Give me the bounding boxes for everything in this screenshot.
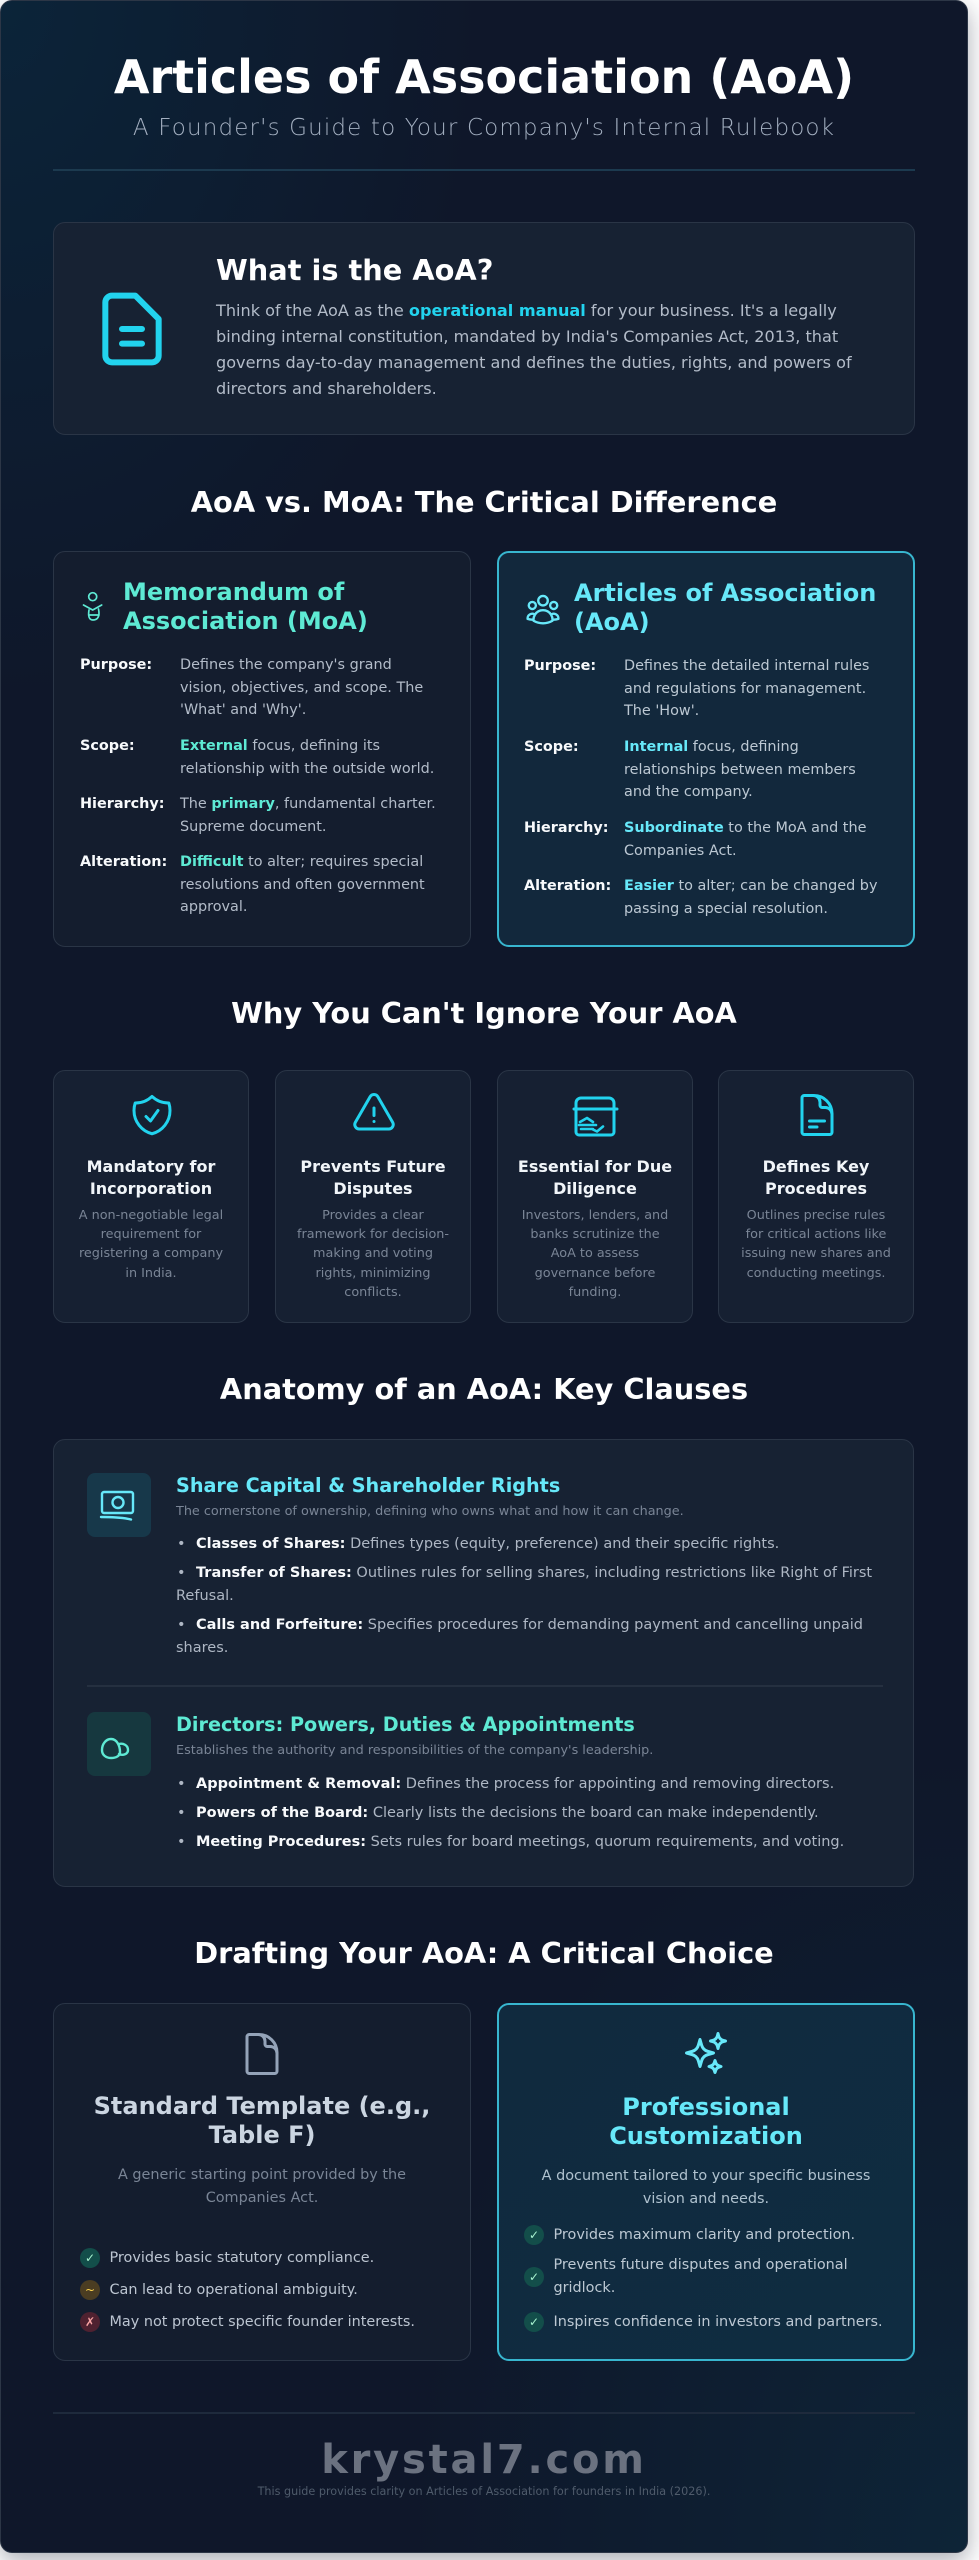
bullet: calls and forfeiture: •: [177, 1617, 186, 1633]
row: hierarchy: Hierarchy:: [80, 796, 165, 812]
card title: [300, 1157, 446, 1198]
row: alteration: Alteration:: [80, 854, 167, 870]
row: hierarchy: The primary, fundamental charter.: [180, 796, 436, 812]
card text: framework for decision-: [297, 1227, 449, 1242]
list item: basic compliance: ✓: [85, 2251, 95, 2265]
card title: [87, 1157, 216, 1198]
card text: [522, 1208, 668, 1300]
card text: A non-negotiable legal: [79, 1208, 223, 1223]
card title: Defines Key: [763, 1157, 869, 1176]
row: purpose: Defines the detailed internal rules: [624, 658, 869, 674]
description: [118, 2167, 406, 2206]
card title: Disputes: [333, 1179, 413, 1198]
bullet: calls and forfeiture: shares.: [176, 1640, 228, 1656]
clause subtitle: The cornerstone of ownership, defining who owns what and how it can change.: [176, 1504, 684, 1519]
bullet: powers of the board: •: [177, 1805, 186, 1821]
heading: AoA: [574, 579, 876, 636]
card text: [741, 1208, 891, 1281]
heading: AoA: Articles of Association: [574, 579, 876, 607]
row: purpose: Purpose:: [80, 657, 152, 673]
row: scope: Scope:: [80, 738, 135, 754]
card: essential for due diligence: [497, 1070, 693, 1323]
heading: MoA: Memorandum of: [123, 578, 344, 606]
card text: conducting meetings.: [747, 1266, 885, 1281]
card title: Essential for Due: [518, 1157, 672, 1176]
card text: governance before: [535, 1266, 655, 1281]
card: defines key procedures: [718, 1070, 914, 1323]
heading: AoA vs MoA: AoA vs. MoA: The Critical Difference: [191, 485, 777, 519]
icon: bank card: [572, 1096, 618, 1136]
card text: in India.: [125, 1266, 177, 1281]
icon: sparkles: [682, 2029, 730, 2077]
card title: [518, 1157, 672, 1198]
row: scope: and the company.: [624, 784, 753, 800]
bullet: transfer of shares: [176, 1565, 872, 1604]
list item: clarity: [524, 2225, 894, 2247]
row: hierarchy: Hierarchy:: [524, 820, 609, 836]
icon: document text: [800, 1094, 834, 1136]
row: scope: Scope:: [524, 739, 579, 755]
description: vision and needs.: [643, 2191, 769, 2207]
clause bullets: Classes of Shares: Defines types (equity, preference) and their specific rights.: [196, 1536, 779, 1552]
row: purpose: [524, 658, 869, 719]
card text: [78, 1208, 223, 1281]
list item: ambiguity: ~: [85, 2283, 95, 2297]
row: alteration: resolutions and often government: [180, 877, 425, 893]
intro paragraph: binding internal constitution, mandated by India's Companies Act, 2013, that: [216, 327, 838, 346]
row: alteration: Easier to alter; can be changed by: [624, 878, 877, 894]
panel: articles of association: [497, 551, 915, 947]
card text: Outlines precise rules: [747, 1208, 885, 1223]
footer note: This guide provides clarity on Articles of Association for founders in India (2026).: [258, 2485, 710, 2498]
card text: Provides a clear: [322, 1208, 424, 1223]
heading: MoA: Association (MoA): [123, 607, 368, 635]
clause: share capital: [87, 1473, 872, 1656]
clause subtitle: Establishes the authority and responsibilities of the company's leadership.: [176, 1743, 653, 1758]
card: prevents future disputes: [275, 1070, 471, 1323]
list item: clarity: ✓: [529, 2228, 539, 2242]
description: A document tailored to your specific business: [542, 2168, 870, 2184]
list item: founder interests: ✗: [85, 2315, 95, 2329]
list item: disputes: ✓: [529, 2270, 539, 2284]
bullet: meeting procedures: Meeting Procedures: Sets rules for board meetings, quorum requirements, and voting.: [196, 1834, 844, 1850]
row: hierarchy: Supreme document.: [180, 819, 326, 835]
clause bullets: •: [177, 1536, 186, 1552]
list item: clarity: Provides maximum clarity and protection.: [554, 2226, 855, 2242]
panel: what is the AoA: [53, 222, 915, 435]
icon: blank document: [246, 2033, 278, 2075]
row: scope: relationships between members: [624, 762, 856, 778]
bullet: meeting procedures: •: [177, 1834, 186, 1850]
icon: MoA person: [82, 592, 102, 621]
intro paragraph: directors and shareholders.: [216, 379, 437, 398]
list item: founder interests: May not protect specific founder interests.: [110, 2314, 415, 2330]
panel: memorandum of association: [53, 551, 471, 947]
card text: for critical actions like: [746, 1227, 886, 1242]
card text: AoA to assess: [551, 1246, 639, 1261]
heading: anatomy: Anatomy of an AoA: Key Clauses: [220, 1372, 748, 1406]
description: [499, 2165, 913, 2210]
card title: Procedures: [765, 1179, 867, 1198]
heading: what is the AoA: What is the AoA?: [216, 253, 493, 287]
list item: disputes: gridlock.: [554, 2280, 615, 2296]
intro paragraph: [216, 301, 852, 398]
icon: document: [102, 292, 162, 366]
card title: [763, 1157, 869, 1198]
list item: confidence: Inspires confidence in investors and partners.: [554, 2314, 883, 2330]
card text: Investors, lenders, and: [522, 1208, 668, 1223]
card text: issuing new shares and: [741, 1246, 891, 1261]
intro paragraph: governs day-to-day management and defines the duties, rights, and powers of: [216, 353, 852, 372]
clause: directors: [87, 1712, 844, 1850]
row: scope: External focus, defining its: [180, 738, 380, 754]
row: purpose: The 'How'.: [624, 703, 699, 719]
bullet: transfer of shares: •: [177, 1565, 186, 1581]
bullet: appointment and removal: •: [177, 1776, 186, 1792]
panel: key clauses: [53, 1439, 914, 1887]
icon: user group: [526, 594, 560, 624]
title: Professional: [622, 2093, 790, 2121]
row: scope: relationship with the outside world.: [180, 761, 434, 777]
card text: conflicts.: [344, 1285, 402, 1300]
panel: professional customization: [497, 2003, 915, 2361]
row: alteration: Alteration:: [524, 878, 611, 894]
card title: Prevents Future: [300, 1157, 446, 1176]
heading: AoA: (AoA): [574, 608, 650, 636]
row: alteration: approval.: [180, 899, 247, 915]
row: alteration: Difficult to alter; requires special: [180, 854, 423, 870]
row: purpose: Defines the company's grand: [180, 657, 392, 673]
list item: confidence: ✓: [529, 2315, 539, 2329]
row: purpose: and regulations for management.: [624, 681, 866, 697]
description: Companies Act.: [206, 2190, 318, 2206]
row: scope: [524, 739, 856, 800]
description: A generic starting point provided by the: [118, 2167, 406, 2183]
heading: MoA: [123, 578, 368, 635]
row: purpose: vision, objectives, and scope. The: [180, 680, 423, 696]
card title: Diligence: [553, 1179, 637, 1198]
bullet: calls and forfeiture: [176, 1617, 863, 1656]
title: Table F): [209, 2121, 315, 2149]
icon: blob: [87, 1712, 151, 1776]
card text: rights, minimizing: [315, 1266, 431, 1281]
list item: basic compliance: Provides basic statutory compliance.: [110, 2250, 374, 2266]
list item: disputes: Prevents future disputes and operational: [554, 2257, 848, 2273]
card text: funding.: [569, 1285, 621, 1300]
list item: confidence: [524, 2312, 894, 2334]
title: [499, 2093, 913, 2151]
row: purpose: 'What' and 'Why'.: [180, 702, 306, 718]
row: hierarchy: Companies Act.: [624, 843, 737, 859]
icon: banknote: [87, 1473, 151, 1537]
heading: why you can't ignore: Why You Can't Ignore Your AoA: [231, 996, 737, 1030]
clause title: Share Capital & Shareholder Rights: [176, 1474, 560, 1497]
row: alteration: [80, 854, 425, 915]
icon: shield check: [132, 1094, 172, 1136]
icon: warning triangle: [353, 1093, 395, 1130]
bullet: powers of the board: Powers of the Board: Clearly lists the decisions the board can make independently.: [196, 1805, 819, 1821]
card text: registering a company: [79, 1246, 223, 1261]
list item: ambiguity: Can lead to operational ambiguity.: [110, 2282, 358, 2298]
card text: banks scrutinize the: [530, 1227, 660, 1242]
title: Articles of Association (AoA): [114, 50, 854, 104]
title: Standard Template (e.g.,: [94, 2092, 430, 2120]
title: [94, 2092, 430, 2149]
row: purpose: Purpose:: [524, 658, 596, 674]
card text: requirement for: [101, 1227, 201, 1242]
row: scope: [80, 738, 434, 777]
row: scope: Internal focus, defining: [624, 739, 799, 755]
row: alteration: [524, 878, 878, 917]
clause title: Directors: Powers, Duties & Appointments: [176, 1713, 635, 1736]
card title: Incorporation: [90, 1179, 212, 1198]
heading: drafting: Drafting Your AoA: A Critical Choice: [194, 1936, 774, 1970]
card: mandatory for incorporation: [53, 1070, 249, 1323]
bullet: appointment and removal: Appointment & Removal: Defines the process for appointing and removing directors.: [196, 1776, 834, 1792]
row: purpose: [80, 657, 423, 718]
card text: [297, 1208, 449, 1300]
panel: standard template: [53, 2003, 471, 2361]
footer brand: krystal7.com: [321, 2437, 647, 2483]
row: alteration: passing a special resolution.: [624, 901, 828, 917]
intro paragraph: Think of the AoA as the operational manual for your business. It's a legally: [216, 301, 837, 320]
row: hierarchy: [80, 796, 436, 835]
list item: disputes: [524, 2254, 894, 2300]
subtitle: A Founder's Guide to Your Company's Internal Rulebook: [133, 115, 835, 141]
card title: Mandatory for: [87, 1157, 215, 1176]
bullet: calls and forfeiture: Calls and Forfeiture: Specifies procedures for demanding payment and cancelling unpaid: [196, 1617, 863, 1633]
title: Customization: [609, 2122, 803, 2150]
card text: making and voting: [313, 1246, 433, 1261]
bullet: transfer of shares: Refusal.: [176, 1588, 234, 1604]
bullet: transfer of shares: Transfer of Shares: Outlines rules for selling shares, including restrictions like Right of First: [196, 1565, 872, 1581]
row: hierarchy: [524, 820, 866, 859]
row: hierarchy: Subordinate to the MoA and the: [624, 820, 866, 836]
